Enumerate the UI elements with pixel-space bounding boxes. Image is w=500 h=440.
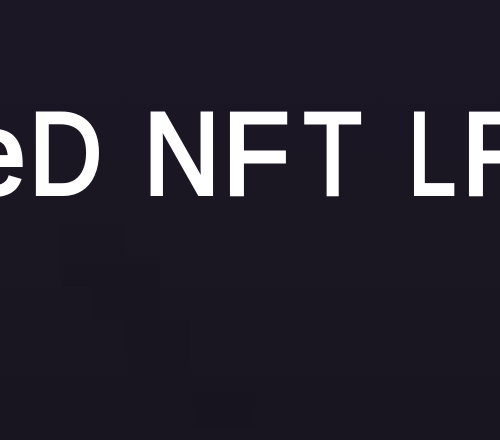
title: cropped headline text: T — [304, 89, 362, 219]
title: cropped headline text: L — [408, 88, 456, 219]
title: cropped headline text: N — [144, 88, 220, 219]
title: cropped headline text — [0, 88, 500, 220]
title: cropped headline text: D — [29, 89, 102, 220]
title: cropped headline text: F — [223, 89, 290, 220]
